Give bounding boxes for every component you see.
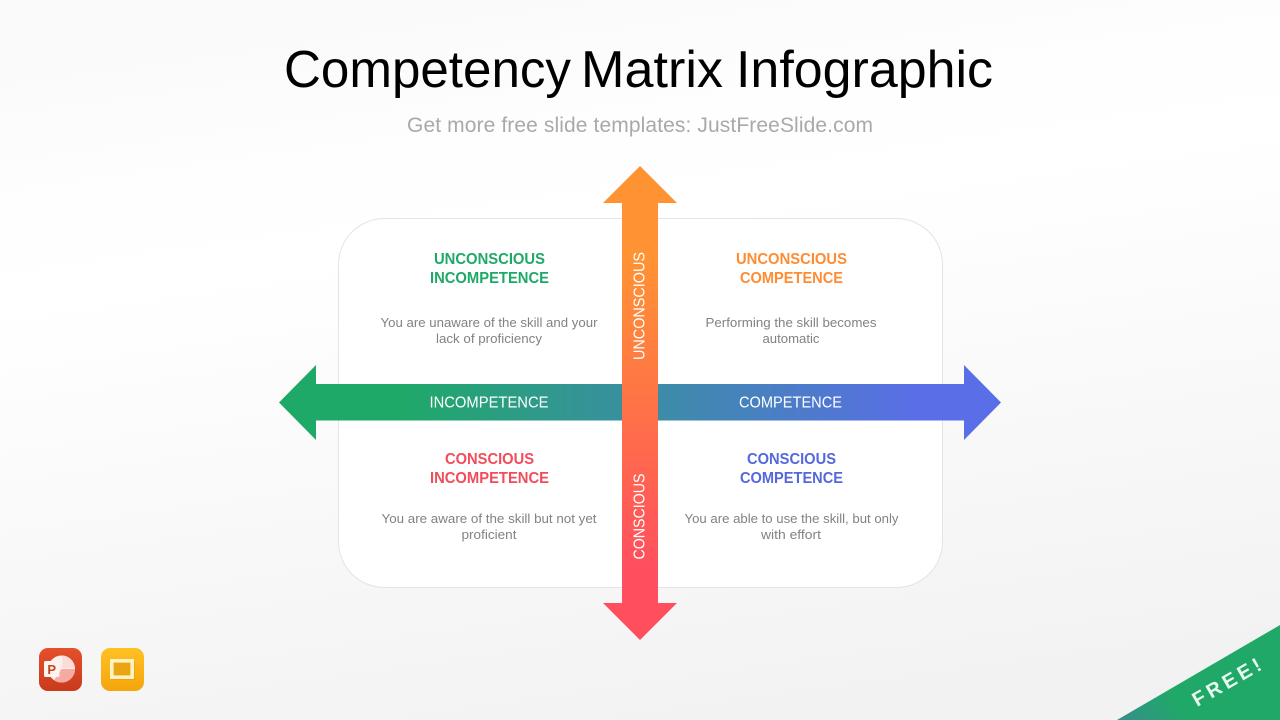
ribbon: free badge — [1117, 625, 1280, 720]
title: Competency — [284, 41, 571, 99]
title: Matrix — [581, 41, 723, 99]
text: unconscious competence description: Performing the skill becomes — [706, 316, 876, 330]
label: unconscious: UNCONSCIOUS — [632, 252, 648, 360]
text: conscious competence description: You are able to use the skill, but only — [684, 512, 899, 526]
label: conscious: CONSCIOUS — [632, 474, 648, 560]
heading: unconscious incompetence: UNCONSCIOUS — [434, 251, 545, 268]
quadrant: unconscious competence — [706, 251, 876, 346]
subtitle: Get more free slide templates: JustFreeSlide.com — [407, 114, 873, 137]
quadrant: conscious competence — [684, 451, 899, 542]
heading: conscious incompetence: CONSCIOUS — [445, 451, 534, 468]
panel: matrix card — [338, 218, 942, 588]
heading: unconscious competence: COMPETENCE — [740, 270, 843, 287]
text: unconscious incompetence description: lack of proficiency — [436, 332, 543, 346]
icon: google slides — [101, 648, 144, 691]
icon: powerpoint — [39, 648, 82, 691]
label: competence: COMPETENCE — [739, 394, 842, 412]
quadrant: conscious incompetence — [382, 451, 597, 542]
heading: conscious competence: CONSCIOUS — [747, 451, 836, 468]
icon: powerpoint: P — [47, 662, 56, 677]
text: unconscious incompetence description: You are unaware of the skill and your — [380, 316, 598, 330]
text: conscious incompetence description: proficient — [462, 528, 517, 542]
text: unconscious competence description: automatic — [762, 332, 820, 346]
text: conscious incompetence description: You are aware of the skill but not yet — [382, 512, 597, 526]
title: Infographic — [736, 41, 993, 99]
heading: conscious competence: COMPETENCE — [740, 470, 843, 487]
heading: conscious incompetence: INCOMPETENCE — [430, 470, 549, 487]
arrow: horizontal incompetence to competence — [279, 365, 1001, 440]
heading: unconscious competence: UNCONSCIOUS — [736, 251, 847, 268]
label: incompetence: INCOMPETENCE — [430, 394, 548, 412]
arrow: vertical unconscious to conscious — [603, 166, 677, 640]
heading: unconscious incompetence: INCOMPETENCE — [430, 270, 549, 287]
quadrant: unconscious incompetence — [380, 251, 598, 346]
text: conscious competence description: with effort — [760, 528, 822, 542]
ribbon text: FREE! — [1189, 654, 1265, 711]
